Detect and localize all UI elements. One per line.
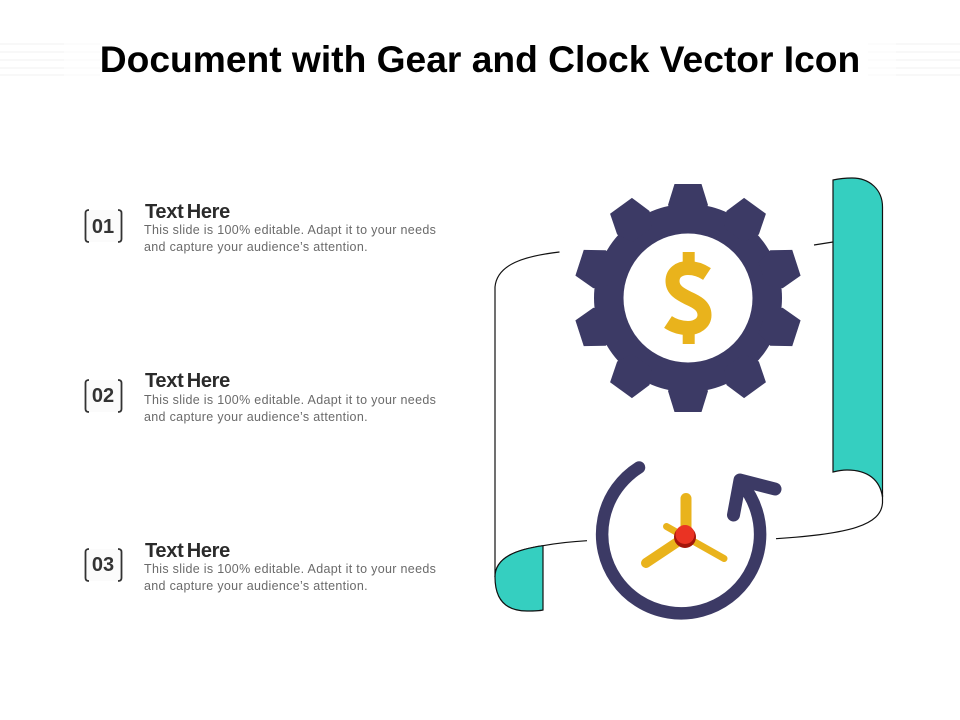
number badge 03: 03 <box>92 554 114 576</box>
number badge 02 <box>84 379 122 413</box>
heading 01: Text Here <box>145 201 230 223</box>
teal scroll fold: bottom left <box>495 546 543 611</box>
panel: step 01 <box>84 201 436 254</box>
heading 03: Text Here <box>145 540 230 562</box>
text block 02 <box>144 393 436 424</box>
heading 02: Text Here <box>145 370 230 392</box>
text block 01: This slide is 100% editable. Adapt it to your needs <box>144 223 436 237</box>
text block 01 <box>144 223 436 254</box>
number badge 01 <box>84 209 122 243</box>
icon: clock with circular arrow <box>602 468 775 613</box>
icon: gear with dollar sign <box>573 184 803 412</box>
number badge 02: 02 <box>92 385 114 407</box>
document scroll illustration <box>494 177 884 620</box>
panel: step 02 <box>84 370 436 424</box>
number badge 01: 01 <box>92 216 114 238</box>
text block 02: and capture your audience’s attention. <box>144 410 368 424</box>
document scroll outline <box>495 242 882 577</box>
teal scroll fold: top right <box>833 178 882 497</box>
text block 03: This slide is 100% editable. Adapt it to your needs <box>144 562 436 576</box>
panel: step 03 <box>84 540 436 592</box>
text block 03: and capture your audience’s attention. <box>144 578 368 592</box>
title: Document with Gear and Clock Vector Icon <box>100 38 860 80</box>
text block 03 <box>144 562 436 592</box>
number badge 03 <box>84 548 122 582</box>
text block 02: This slide is 100% editable. Adapt it to your needs <box>144 393 436 407</box>
text block 01: and capture your audience’s attention. <box>144 240 368 254</box>
